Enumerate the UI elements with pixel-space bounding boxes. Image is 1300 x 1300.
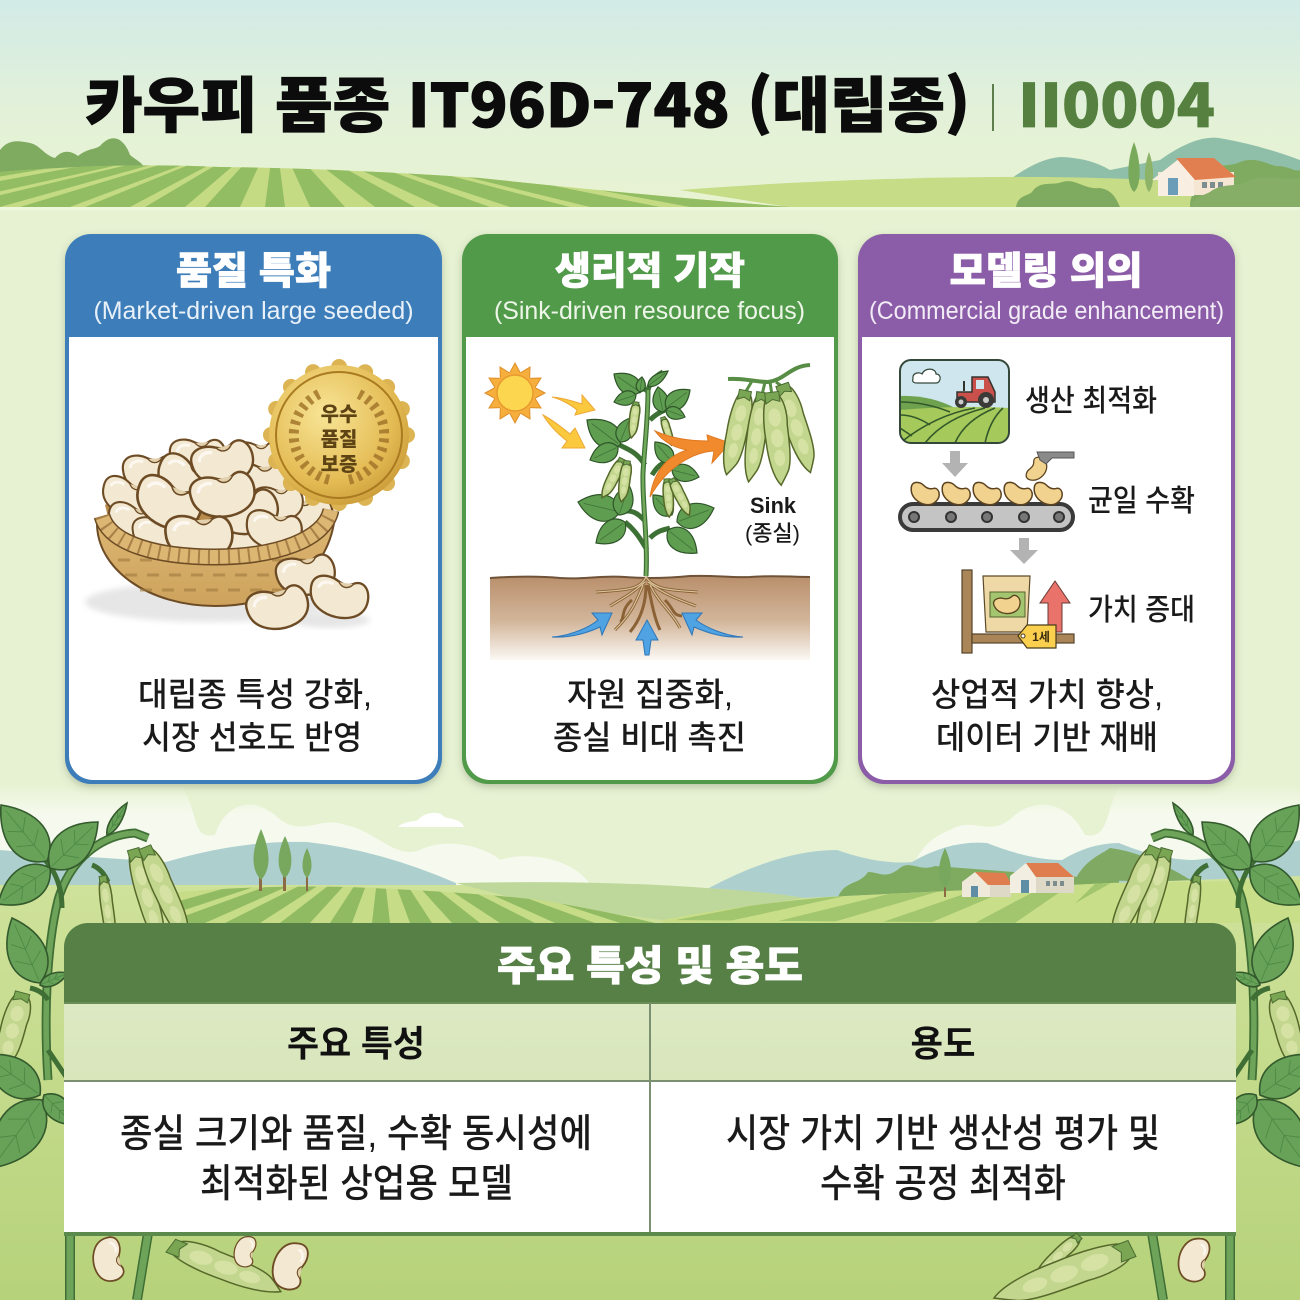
panel heading: (Commercial grade enhancement) <box>869 297 1224 325</box>
panel caption: 데이터 기반 재배 <box>936 719 1158 756</box>
icon: conveyor with beans <box>900 452 1074 530</box>
table title: 주요 특성 및 용도 <box>497 943 803 989</box>
panel heading: (Market-driven large seeded) <box>94 297 414 325</box>
bottom beans and pods <box>90 1231 1211 1300</box>
panel heading: 품질 특화 <box>176 251 331 293</box>
panel heading: (Sink-driven resource focus) <box>494 297 805 325</box>
left bean plant <box>0 793 198 1300</box>
panel caption: 상업적 가치 향상, <box>931 676 1163 713</box>
cell: 용도 설명: 수확 공정 최적화 <box>820 1163 1066 1206</box>
column head: 주요 특성: 주요 특성 <box>287 1023 425 1064</box>
label: 가치 증대: 가치 증대 <box>1088 594 1195 627</box>
panel caption <box>553 676 746 756</box>
cell: 주요 특성 설명 <box>120 1113 592 1206</box>
label: 생산 최적화: 생산 최적화 <box>1025 385 1157 418</box>
icon: gold quality medal: 품질 <box>321 423 357 452</box>
sink label: (종실) <box>745 521 800 546</box>
panel: 모델링 의의 <box>858 234 1235 784</box>
cell: 주요 특성 설명: 종실 크기와 품질, 수확 동시성에 <box>120 1113 592 1156</box>
icon: farmhouses <box>939 848 1074 897</box>
panel caption <box>138 676 372 756</box>
table: 주요 특성 및 용도 <box>64 923 1236 1236</box>
icon: soybean plant <box>575 366 718 576</box>
soil and roots <box>490 576 810 660</box>
panel heading <box>94 251 414 325</box>
cell: 용도 설명 <box>726 1113 1160 1206</box>
cell: 용도 설명: 시장 가치 기반 생산성 평가 및 <box>726 1113 1160 1156</box>
icon: farmhouse <box>1152 158 1236 196</box>
panel: 생리적 기작 <box>462 234 838 784</box>
cell: 주요 특성 설명: 최적화된 상업용 모델 <box>200 1163 513 1206</box>
panel heading: 생리적 기작 <box>555 251 745 293</box>
title: 카우피 품종 IT96D-748 (대립종) <box>85 58 970 145</box>
icon: gold quality medal <box>269 365 409 505</box>
icon: packaged product with price tag <box>962 570 1074 653</box>
panel caption: 종실 비대 촉진 <box>553 719 746 756</box>
icon: cypress trees <box>1128 142 1153 192</box>
sink label: Sink <box>750 493 797 518</box>
panel caption: 자원 집중화, <box>567 676 733 713</box>
label: 균일 수확: 균일 수확 <box>1088 485 1195 518</box>
icon: hanging pods <box>718 365 823 486</box>
icon: sun <box>485 363 545 423</box>
panel heading <box>869 251 1224 325</box>
arrow: sunlight 2 <box>543 415 585 448</box>
panel caption: 시장 선호도 반영 <box>142 719 362 756</box>
icon: packaged product with price tag: 1세 <box>1032 630 1050 644</box>
icon: cypress trees left <box>253 829 312 891</box>
panel heading <box>494 251 805 325</box>
sink label <box>745 493 800 546</box>
icon: gold quality medal: 보증 <box>321 448 357 477</box>
right bean plant <box>1102 793 1300 1300</box>
column head: 용도: 용도 <box>910 1023 976 1064</box>
arrow: sunlight 1 <box>552 395 595 415</box>
icon: gold quality medal: 우수 <box>321 398 357 427</box>
panel: 품질 특화 <box>65 234 442 784</box>
icon: field with tractor <box>900 360 1009 443</box>
title: II0004 <box>1018 58 1215 145</box>
icon: basket of beans <box>85 438 371 635</box>
top farmland scene <box>0 130 1300 207</box>
arrow: down 2 <box>1010 538 1038 564</box>
panel caption: 대립종 특성 강화, <box>138 676 372 713</box>
arrows: water uptake <box>552 613 743 655</box>
panel caption <box>931 676 1163 756</box>
arrow: resource flow to sink <box>650 431 730 497</box>
panel heading: 모델링 의의 <box>950 251 1142 293</box>
lower farmland scene <box>0 785 1300 1300</box>
arrow: down 1 <box>942 451 968 477</box>
